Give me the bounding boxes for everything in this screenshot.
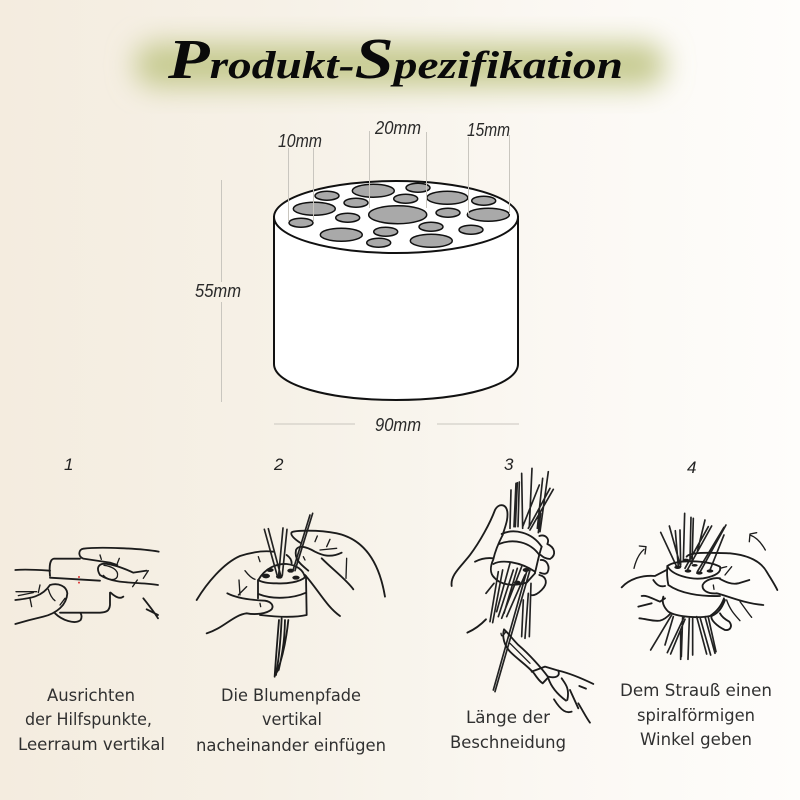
label: 20mm: 20mm bbox=[374, 118, 421, 138]
step 2 illustration: inserting stems bbox=[197, 513, 385, 677]
label: 10mm: 10mm bbox=[278, 131, 322, 151]
label: 90mm: 90mm bbox=[375, 415, 421, 435]
step 3 caption: Länge der bbox=[466, 708, 550, 728]
step 1 caption: Ausrichten bbox=[47, 686, 135, 706]
step 4 caption: Winkel geben bbox=[640, 730, 752, 750]
label: 15mm: 15mm bbox=[467, 120, 510, 140]
product diagram: cylinder with holes bbox=[274, 181, 518, 400]
step 4 caption bbox=[620, 681, 772, 750]
step 1 caption bbox=[18, 686, 165, 755]
step 1 caption: Leerraum vertikal bbox=[18, 735, 165, 755]
step 3 illustration: trimming stems bbox=[452, 468, 593, 723]
title: Produkt- Spezifikation bbox=[167, 26, 623, 91]
step 4 caption: Dem Strauß einen bbox=[620, 681, 772, 701]
step 2 caption: Die Blumenpfade bbox=[221, 686, 361, 706]
cylinder top with holes bbox=[274, 181, 518, 253]
step 3 number: 3 bbox=[504, 455, 514, 474]
step 4 number: 4 bbox=[687, 458, 696, 477]
step 3 caption: Beschneidung bbox=[450, 733, 566, 753]
cylinder body bbox=[274, 217, 518, 400]
step 4 illustration: spiral angle bbox=[622, 513, 777, 659]
step 1 illustration: aligning the guide points bbox=[15, 548, 159, 624]
step 2 caption: nacheinander einfügen bbox=[196, 736, 386, 756]
step 3 caption bbox=[450, 708, 566, 753]
step 2 number: 2 bbox=[273, 455, 284, 474]
step 2 caption: vertikal bbox=[262, 710, 322, 730]
step 1 number: 1 bbox=[64, 455, 73, 474]
step 2 caption bbox=[196, 686, 386, 756]
label: 55mm: 55mm bbox=[195, 281, 241, 301]
step 1 caption: der Hilfspunkte, bbox=[25, 710, 152, 730]
step 4 caption: spiralförmigen bbox=[637, 706, 755, 726]
